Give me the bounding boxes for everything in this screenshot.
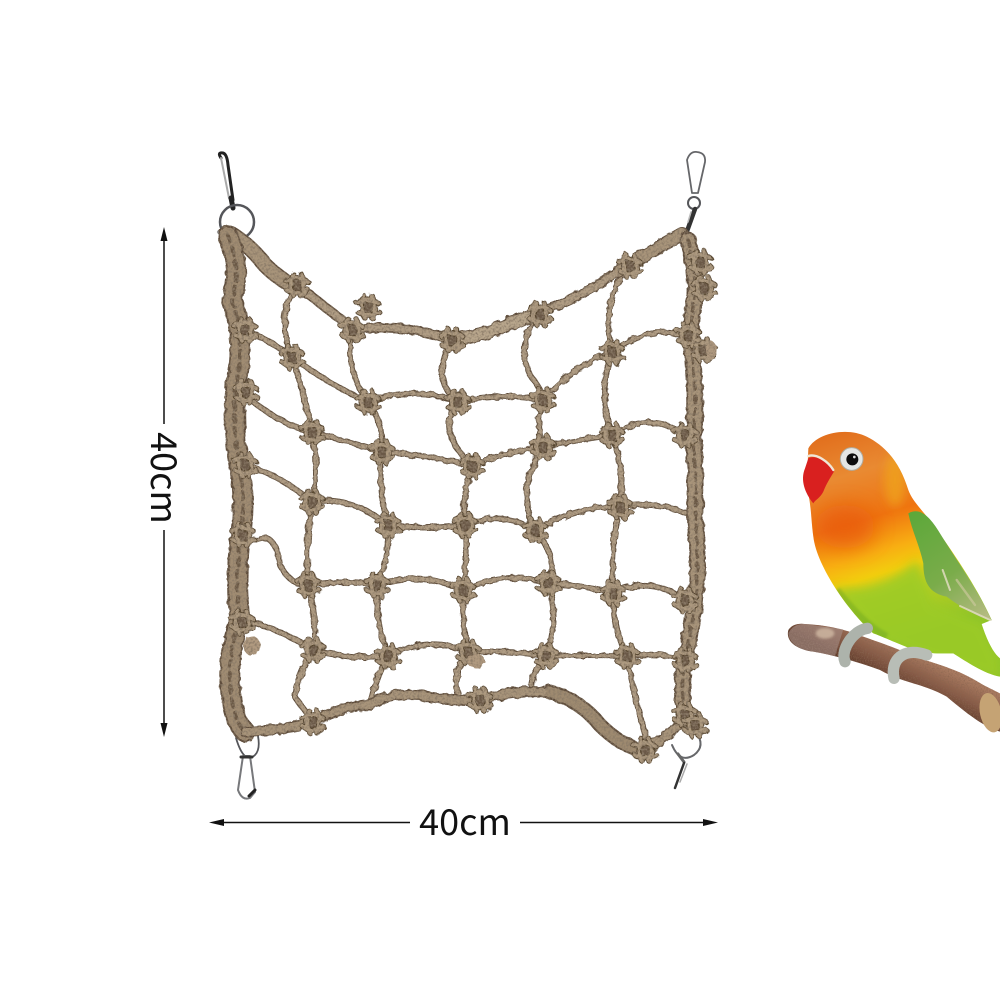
rope: top edge (228, 232, 682, 340)
vertical dimension label: 40cm (140, 432, 192, 524)
wing (908, 511, 992, 621)
cords: light twist (245, 265, 690, 745)
branch cut end (976, 691, 1000, 734)
beak (803, 457, 834, 503)
hardware: metal clips and rings (219, 152, 705, 799)
parrot on branch (788, 432, 1000, 734)
clip: top right (686, 152, 705, 234)
clip: top left (219, 153, 254, 243)
cords: dark base (245, 265, 690, 745)
knots (231, 251, 715, 761)
horizontal dimension arrow (209, 794, 718, 846)
frayed rope ends (244, 341, 716, 668)
wing feather tips (943, 570, 990, 620)
vertical dimension arrow (140, 227, 192, 737)
belly green (833, 560, 1000, 680)
clip: bottom right (672, 732, 701, 788)
rope: bottom edge (245, 692, 690, 752)
rope: left edge (228, 236, 245, 732)
belly side shade (837, 590, 887, 637)
branch (788, 624, 1000, 734)
rope: right edge (682, 240, 698, 715)
horizontal dimension label: 40cm (419, 794, 511, 846)
bird foot left (844, 628, 867, 662)
clip: bottom left (236, 728, 259, 799)
nape shade (884, 453, 906, 507)
bird foot right (893, 652, 927, 678)
bird body (807, 432, 1000, 677)
rope net (228, 232, 716, 761)
eye (840, 448, 863, 470)
chest shade (815, 505, 875, 548)
beak highlight (808, 455, 833, 470)
body shading (815, 453, 1000, 680)
